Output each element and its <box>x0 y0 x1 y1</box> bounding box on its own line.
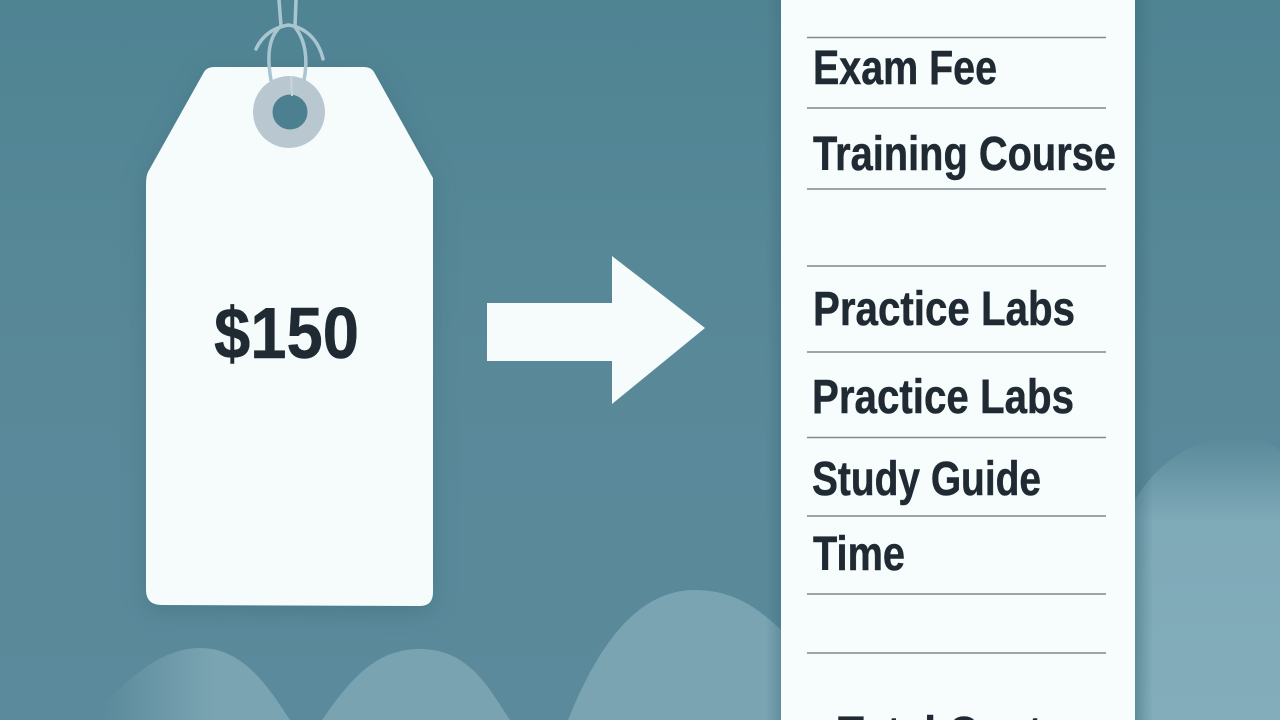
item: time: Time <box>813 528 905 581</box>
item: practice labs: Practice Labs <box>813 283 1075 336</box>
price: $150 <box>214 294 359 374</box>
panel: cost list <box>781 0 1135 720</box>
arrow <box>487 256 705 404</box>
item: study guide: Study Guide <box>812 453 1041 506</box>
item: exam fee: Exam Fee <box>813 42 997 95</box>
string <box>256 0 323 80</box>
tag body <box>146 67 433 606</box>
tag eyelet <box>253 76 325 148</box>
price tag <box>146 0 433 612</box>
item: training course: Training Course <box>813 128 1116 181</box>
item: practice labs repeated: Practice Labs <box>812 371 1074 424</box>
